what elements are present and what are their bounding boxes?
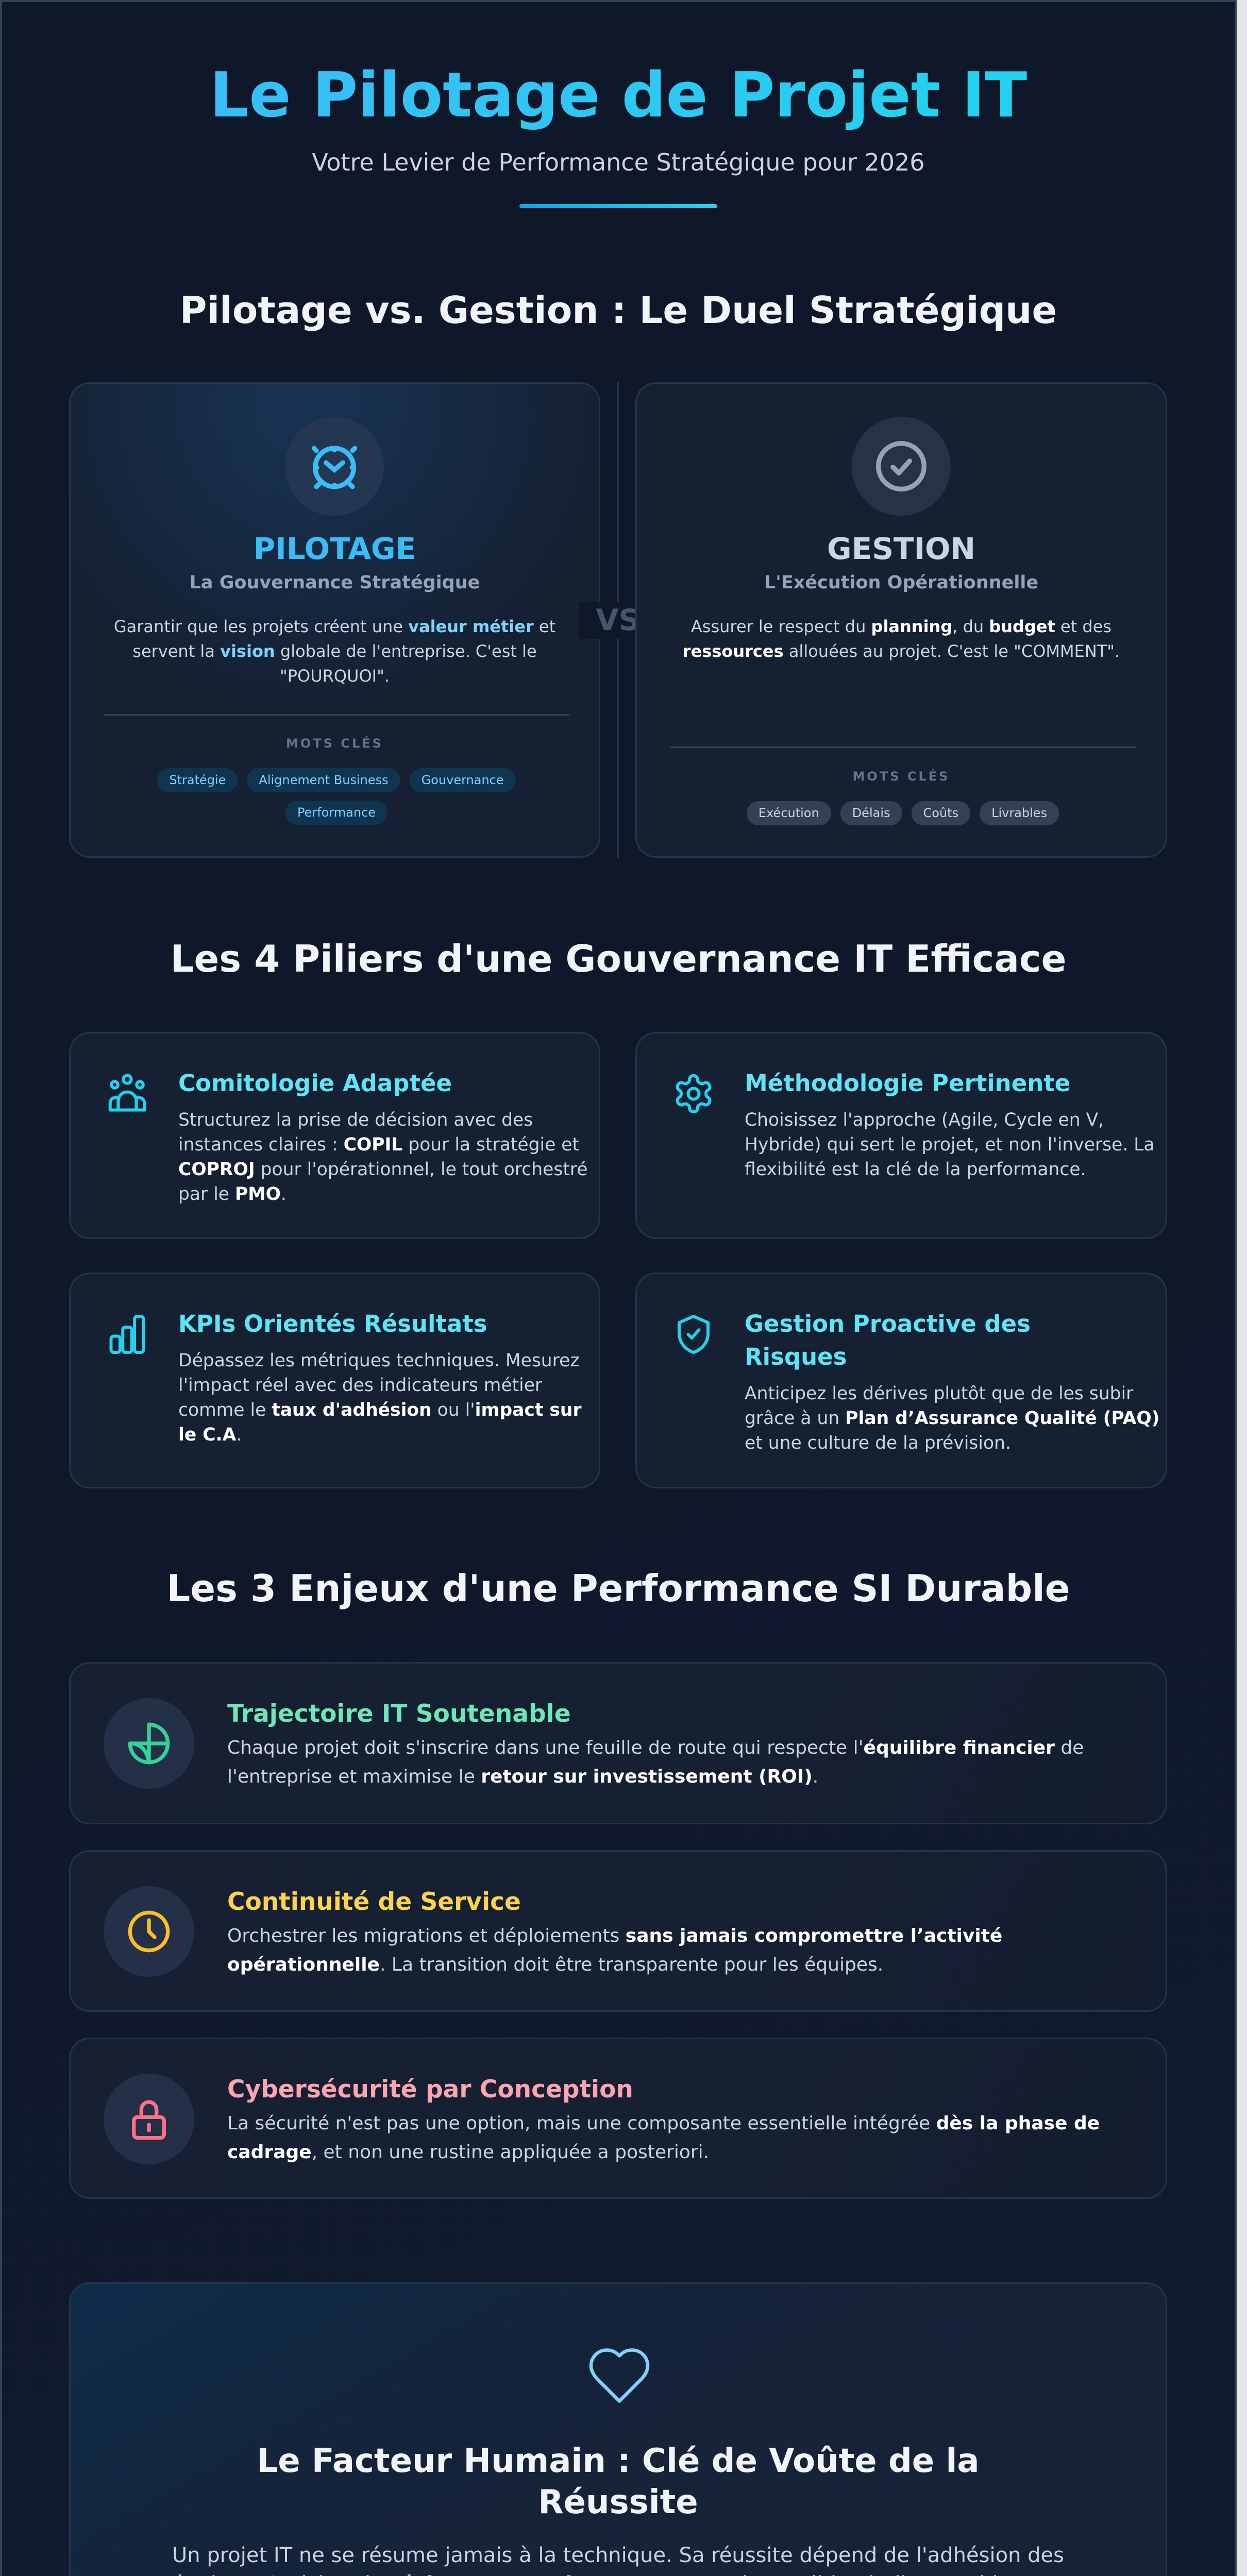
heading: Le Facteur Humain : Clé de Voûte de la bbox=[257, 2442, 980, 2480]
text block: par le PMO. bbox=[178, 1184, 287, 1205]
text block: Hybride) qui sert le projet, et non l'inverse. La bbox=[745, 1134, 1155, 1155]
text: opérationnelle. La transition doit être transparente pour les équipes. bbox=[227, 1954, 883, 1975]
tags: Coûts bbox=[923, 806, 958, 820]
panel: kpis bbox=[69, 1273, 600, 1488]
tags: Délais bbox=[852, 806, 890, 820]
text block: et une culture de la prévision. bbox=[745, 1433, 1011, 1453]
icon: lock bbox=[104, 2074, 194, 2164]
subheading: La Gouvernance Stratégique bbox=[190, 572, 480, 593]
text block: flexibilité est la clé de la performance. bbox=[745, 1159, 1086, 1180]
label: mots clés: MOTS CLÉS bbox=[853, 769, 950, 784]
panel: risques bbox=[635, 1273, 1167, 1488]
title: Cybersécurité par Conception bbox=[227, 2075, 633, 2104]
icon: leaf pie bbox=[104, 1698, 194, 1789]
text: Chaque projet doit s'inscrire dans une feuille de route qui respecte l'équilibre financier de bbox=[227, 1737, 1084, 1758]
panel: gestion bbox=[635, 382, 1167, 858]
title: Trajectoire IT Soutenable bbox=[227, 1700, 571, 1728]
description: servent la vision globale de l'entreprise. C'est le bbox=[132, 641, 537, 661]
panel: trajectoire bbox=[69, 1662, 1167, 1824]
tags: Stratégie bbox=[169, 773, 226, 787]
heading: piliers: Les 4 Piliers d'une Gouvernance IT Efficace bbox=[171, 937, 1066, 980]
heading bbox=[257, 2442, 980, 2521]
text: La sécurité n'est pas une option, mais une composante essentielle intégrée dès la phase de bbox=[227, 2113, 1100, 2134]
icon: clock bbox=[104, 1886, 194, 1977]
text block: Comitologie Adaptée bbox=[178, 1070, 452, 1097]
tags bbox=[157, 768, 516, 825]
vs divider line bbox=[617, 382, 619, 858]
text block: Gestion Proactive des bbox=[745, 1310, 1031, 1337]
text block: KPIs Orientés Résultats bbox=[178, 1310, 487, 1337]
subtitle: Votre Levier de Performance Stratégique pour 2026 bbox=[312, 148, 925, 176]
icon: users bbox=[108, 1074, 146, 1112]
text: Un projet IT ne se résume jamais à la technique. Sa réussite dépend de l'adhésion des bbox=[172, 2544, 1064, 2567]
text: cadrage, et non une rustine appliquée a posteriori. bbox=[227, 2142, 709, 2163]
tags: Performance bbox=[297, 805, 376, 820]
text block: Anticipez les dérives plutôt que de les subir bbox=[745, 1383, 1133, 1404]
text block: Méthodologie Pertinente bbox=[745, 1070, 1070, 1097]
heading: duel: Pilotage vs. Gestion : Le Duel Stratégique bbox=[180, 289, 1057, 332]
panel: facteur humain bbox=[69, 2282, 1167, 2576]
heading: GESTION: GESTION bbox=[827, 531, 975, 566]
text block bbox=[178, 1070, 588, 1205]
tags: Alignement Business bbox=[259, 773, 389, 787]
panel: cybersécurité bbox=[69, 2038, 1167, 2199]
icon: alarm clock bbox=[285, 417, 384, 516]
text block: comme le taux d'adhésion ou l'impact sur bbox=[178, 1400, 581, 1420]
text block bbox=[178, 1310, 581, 1445]
description: Assurer le respect du planning, du budget et des bbox=[691, 617, 1111, 636]
description: ressources allouées au projet. C'est le "COMMENT". bbox=[683, 641, 1120, 661]
tags bbox=[747, 801, 1059, 825]
text block bbox=[745, 1310, 1159, 1453]
text block: Risques bbox=[745, 1343, 847, 1370]
panel: continuité bbox=[69, 1850, 1167, 2012]
text bbox=[227, 1737, 1084, 1787]
badge: VS bbox=[579, 602, 657, 639]
icon: check circle bbox=[852, 417, 951, 516]
panel: méthodologie bbox=[635, 1032, 1167, 1239]
text: l'entreprise et maximise le retour sur investissement (ROI). bbox=[227, 1766, 818, 1787]
text bbox=[227, 1925, 1002, 1975]
tags: Livrables bbox=[991, 806, 1047, 820]
text block: Choisissez l'approche (Agile, Cycle en V, bbox=[745, 1110, 1104, 1130]
icon: heart bbox=[589, 2348, 649, 2403]
text block: grâce à un Plan d’Assurance Qualité (PAQ) bbox=[745, 1408, 1159, 1429]
heading: enjeux: Les 3 Enjeux d'une Performance SI Durable bbox=[166, 1567, 1070, 1610]
icon: bar chart bbox=[109, 1315, 145, 1354]
text block: l'impact réel avec des indicateurs métier bbox=[178, 1375, 542, 1396]
title underline bbox=[519, 204, 717, 208]
badge: VS: VS bbox=[596, 603, 640, 637]
text bbox=[227, 2113, 1100, 2163]
description bbox=[683, 617, 1120, 661]
description bbox=[114, 617, 555, 686]
description: "POURQUOI". bbox=[280, 666, 390, 686]
text block: le C.A. bbox=[178, 1425, 242, 1445]
description: Garantir que les projets créent une valeur métier et bbox=[114, 617, 555, 636]
panel: comitologie bbox=[69, 1032, 600, 1239]
text block: instances claires : COPIL pour la stratégie et bbox=[178, 1134, 579, 1155]
icon: gear bbox=[676, 1074, 712, 1113]
tags: Exécution bbox=[759, 806, 819, 820]
panel: pilotage bbox=[69, 382, 600, 858]
icon: shield check bbox=[678, 1315, 710, 1354]
title: Continuité de Service bbox=[227, 1888, 521, 1916]
title: Le Pilotage de Projet IT bbox=[210, 60, 1027, 131]
label: mots clés: MOTS CLÉS bbox=[286, 736, 383, 751]
tags: Gouvernance bbox=[422, 773, 504, 787]
text: Orchestrer les migrations et déploiements sans jamais compromettre l’activité bbox=[227, 1925, 1002, 1946]
heading: PILOTAGE: PILOTAGE bbox=[254, 531, 416, 566]
subheading: L'Exécution Opérationnelle bbox=[764, 572, 1038, 593]
text block: Dépassez les métriques techniques. Mesurez bbox=[178, 1350, 579, 1371]
text block: Structurez la prise de décision avec des bbox=[178, 1110, 533, 1130]
text block: COPROJ pour l'opérationnel, le tout orchestré bbox=[178, 1159, 588, 1180]
text block bbox=[745, 1070, 1155, 1180]
heading: Réussite bbox=[538, 2483, 698, 2521]
